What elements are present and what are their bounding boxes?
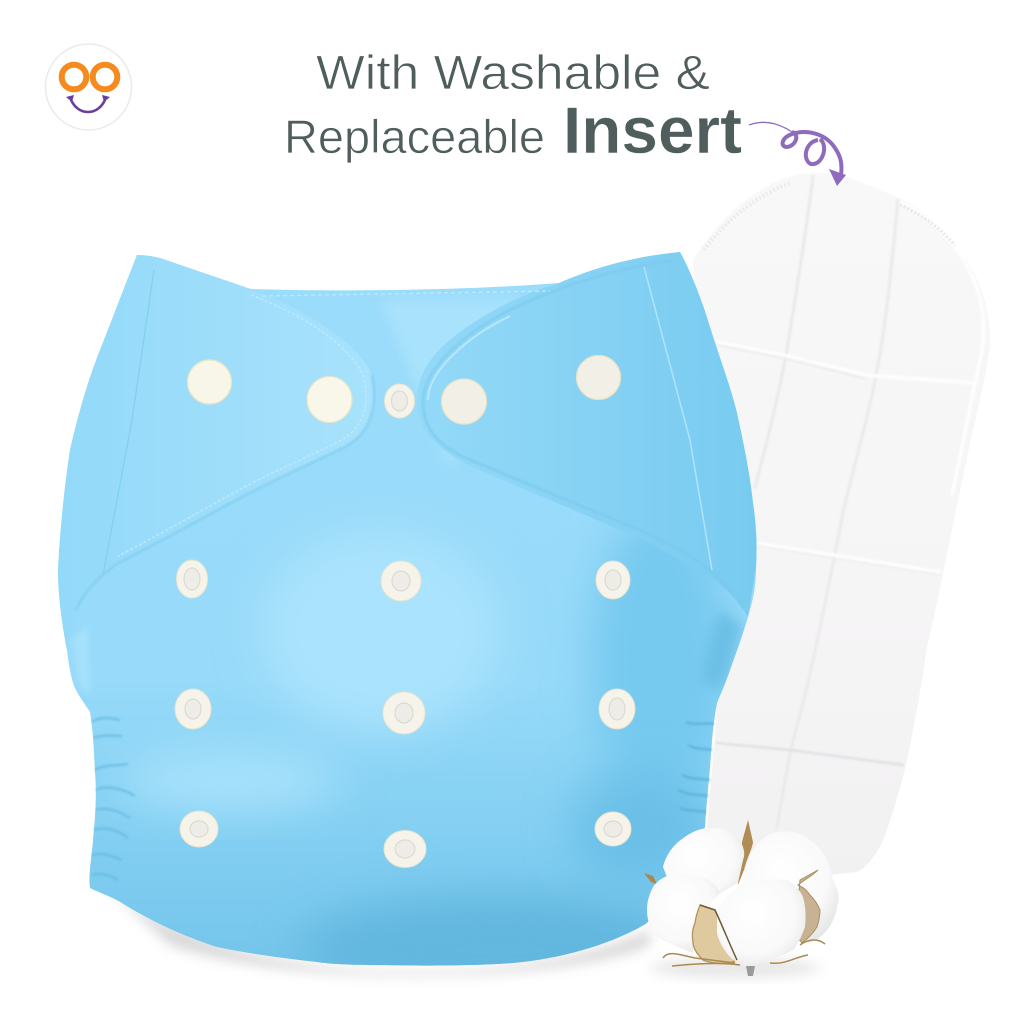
centre cotton lock [717,879,806,968]
left fastening flap [58,255,374,650]
snap buttons: sockets on body [175,384,635,868]
elastic gathers left [92,718,135,880]
top-right cotton lock [742,831,839,943]
heading: Replaceable [284,110,545,163]
leaf bract right [795,870,820,943]
blue cloth diaper [58,252,757,1005]
cotton shadow [650,958,820,978]
upper bract spike [738,820,753,885]
leaf bract left [692,905,737,963]
right fastening flap [417,252,757,617]
curly arrow pointing to insert [749,122,846,186]
elastic gathers right [678,722,714,812]
heading: Insert [563,93,742,167]
heading: With Washable & [316,47,710,100]
dry stems [663,940,825,966]
diaper body [58,252,757,966]
washable insert pad [693,173,990,880]
left cotton lock [647,874,720,953]
diaper shading [72,300,742,1005]
snap buttons: caps on flaps [188,356,620,424]
heading [284,47,742,167]
soft floor shadow [105,885,650,976]
logo: smiley badge [46,44,132,130]
top-left cotton lock [663,828,744,905]
cotton boll [644,820,839,978]
insert quilting seams [717,176,973,827]
waist stitching [262,291,550,296]
